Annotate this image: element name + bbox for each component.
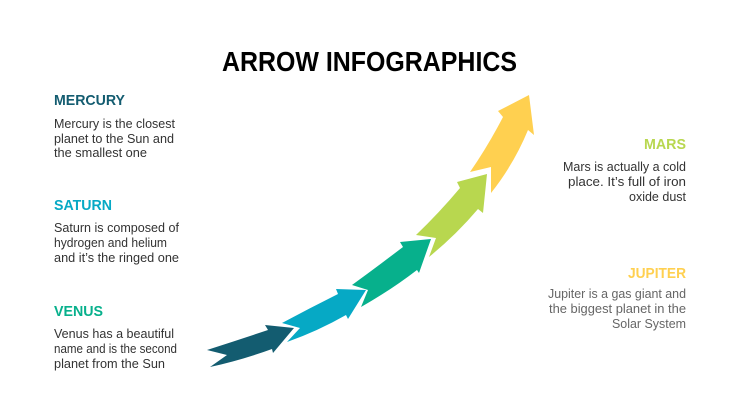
body: Mars: place. It’s full of iron: [568, 175, 686, 189]
arrow: green: [352, 239, 431, 307]
heading: Mars: MARS: [644, 136, 686, 153]
body: Venus: [54, 327, 177, 371]
text block: Venus: [54, 303, 177, 371]
body: Jupiter: the biggest planet in the: [549, 302, 686, 316]
body: Mercury: the smallest one: [54, 146, 147, 160]
arrow: dark teal: [207, 325, 294, 367]
heading: Venus: VENUS: [54, 303, 103, 320]
body: Saturn: Saturn is composed of: [54, 221, 180, 235]
text block: Mercury: [54, 92, 176, 160]
title: ARROW INFOGRAPHICS: [222, 46, 517, 77]
heading: Jupiter: JUPITER: [628, 265, 686, 282]
body: Jupiter: Jupiter is a gas giant and: [548, 287, 686, 301]
arrow: blue: [282, 289, 366, 342]
body: Mars: Mars is actually a cold: [563, 160, 686, 174]
body: Mars: oxide dust: [629, 190, 687, 204]
text block: Saturn: [54, 197, 180, 265]
heading: Mercury: MERCURY: [54, 92, 125, 109]
body: Mercury: Mercury is the closest: [54, 117, 176, 131]
body: Mars: [563, 160, 687, 204]
body: Venus: planet from the Sun: [54, 357, 165, 371]
body: Mercury: [54, 117, 176, 160]
body: Saturn: [54, 221, 180, 265]
text block: Jupiter: [548, 265, 686, 331]
body: Saturn: and it’s the ringed one: [54, 251, 179, 265]
body: Mercury: planet to the Sun and: [54, 132, 174, 146]
text block: Mars: [563, 136, 687, 204]
body: Jupiter: Solar System: [612, 317, 686, 331]
body: Jupiter: [548, 287, 686, 331]
arrow: yellow: [470, 95, 534, 193]
body: Saturn: hydrogen and helium: [54, 236, 167, 250]
body: Venus: name and is the second: [54, 342, 177, 356]
heading: Saturn: SATURN: [54, 197, 112, 214]
arrow chart: [207, 95, 534, 367]
body: Venus: Venus has a beautiful: [54, 327, 174, 341]
arrow: lime: [416, 174, 487, 257]
